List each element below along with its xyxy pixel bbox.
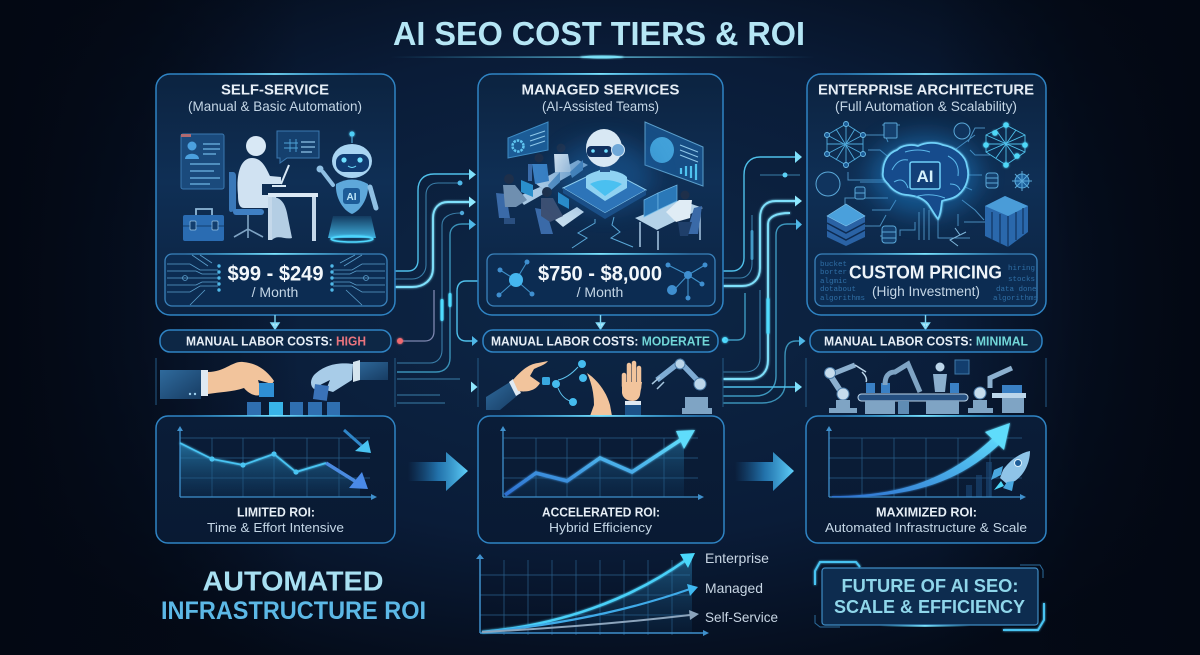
person in grey shirt: [496, 174, 527, 224]
panel: accelerated roi: [478, 415, 724, 543]
per month label: / Month: [252, 284, 298, 300]
chart: tier roi comparison: [476, 550, 778, 636]
connectors: self-service to managed: [395, 169, 478, 403]
decorative algorithm text left: algorithms: [820, 295, 865, 303]
text: limited roi: LIMITED ROI:: [237, 504, 315, 520]
icon: right neural network: [983, 122, 1028, 168]
icon: server racks right: [985, 196, 1028, 247]
pill: manual labor minimal: [810, 330, 1042, 352]
price box: enterprise: [815, 253, 1038, 306]
laptop back: [570, 160, 583, 178]
icon: document db: [884, 123, 897, 138]
panel: limited roi: [156, 415, 395, 543]
icon: puzzle network: [950, 228, 966, 246]
illustration: human and robot hand blocks: [160, 360, 388, 416]
pill: manual labor moderate: MANUAL LABOR COSTS: MODERATE: [491, 334, 710, 348]
icon: profile card: [181, 134, 224, 189]
icon: briefcase: [183, 209, 224, 241]
left desk: [517, 187, 547, 205]
heading: automated infrastructure roi: AUTOMATED: [202, 566, 384, 596]
icon: ai robot: [316, 131, 376, 242]
high investment: (High Investment): [872, 284, 980, 299]
pill: manual labor high: MANUAL LABOR COSTS: HIGH: [186, 334, 366, 348]
text: maximized roi: MAXIMIZED ROI:: [876, 504, 977, 520]
pill: manual labor moderate: [483, 330, 718, 352]
callout: future of ai seo: SCALE & EFFICIENCY: [834, 597, 1025, 617]
illustration: right workstation: [635, 185, 703, 250]
heading: automated infrastructure roi: INFRASTRUCTURE ROI: [161, 597, 426, 625]
decorative algorithm text left: dotabout: [820, 286, 856, 294]
price box: managed: [487, 253, 715, 306]
text: accelerated roi: ACCELERATED ROI:: [542, 504, 660, 520]
price: self-service: $99 - $249: [228, 262, 324, 286]
icon: database right: [986, 173, 998, 188]
icon: ai brain: AI: [916, 167, 934, 186]
illustration: hands and robot arm: [486, 359, 712, 416]
subheading: ai-assisted teams: (AI-Assisted Teams): [542, 98, 659, 114]
panel: maximized roi: [806, 415, 1046, 543]
illustration: right monitor: [645, 122, 703, 186]
node graph decoration: [499, 262, 705, 298]
arrow: self-service price to labor: [271, 315, 279, 329]
price: managed: $750 - $8,000: [538, 262, 662, 286]
front screen: [558, 192, 569, 209]
hand row bracket lines: [156, 358, 1046, 407]
connector: roi to future callout: [925, 543, 927, 568]
icon: ai robot: AI: [346, 192, 357, 203]
illustration: left monitor: [508, 122, 548, 158]
left monitor screen: [521, 180, 533, 197]
decorative algorithm text right: data done: [996, 286, 1037, 294]
arrow: roi tier two to three: [735, 452, 794, 491]
icon: small database: [855, 187, 865, 199]
person in white shirt: [554, 144, 571, 172]
icon: stacked server left: [827, 204, 865, 246]
callout: future of ai seo: FUTURE OF AI SEO:: [842, 576, 1018, 596]
illustration: robotic factory: [824, 360, 1026, 414]
icon: left neural network: [824, 122, 866, 168]
decorative algorithm text right: [993, 265, 1038, 303]
price box: self-service: [165, 253, 387, 306]
illustration: ai robot on pedestal: [557, 129, 653, 248]
chart: rising roi: [500, 426, 704, 500]
heading: enterprise architecture: ENTERPRISE ARCHITECTURE: [818, 82, 1034, 98]
icon: network node: [1012, 171, 1032, 191]
subheading: manual and basic automation: (Manual & Basic Automation): [188, 98, 362, 114]
illustration: circuit links: [845, 125, 990, 238]
heading: self-service: SELF-SERVICE: [221, 82, 329, 98]
circuit decoration: [167, 255, 385, 305]
text: automated infrastructure: Automated Infrastructure & Scale: [825, 520, 1027, 535]
pill: manual labor minimal: MANUAL LABOR COSTS: MINIMAL: [824, 334, 1028, 348]
icon: rocket: [991, 451, 1030, 491]
heading: automated infrastructure roi: [161, 566, 426, 625]
person with dark hair: [535, 187, 563, 234]
person in blue shirt: [528, 154, 549, 184]
legend: enterprise: Enterprise: [705, 550, 769, 566]
decorative algorithm text right: algorithms: [993, 295, 1038, 303]
icon: chat window: [277, 131, 319, 163]
title: AI SEO COST TIERS & ROI: [393, 15, 805, 52]
panel: enterprise architecture: [807, 73, 1046, 315]
icon: database middle: [882, 226, 896, 243]
pill: manual labor high: [160, 330, 391, 352]
legend: self-service: Self-Service: [705, 609, 778, 625]
icon: person at desk: [229, 136, 318, 241]
subheading: full automation: (Full Automation & Scalability): [835, 98, 1017, 114]
custom pricing: CUSTOM PRICING: [849, 262, 1002, 282]
front desk: [555, 207, 584, 227]
callout: future of ai seo: [815, 562, 1044, 630]
connectors: managed to enterprise: [722, 151, 806, 403]
chart: declining roi: [177, 426, 377, 500]
back desk: [535, 160, 588, 190]
arrow: enterprise price to labor: [922, 315, 930, 329]
panel: managed services: [478, 73, 723, 315]
decorative algorithm text left: bucket: [820, 261, 847, 269]
decorative algorithm text right: hiring: [1008, 265, 1035, 273]
chart: maximized growth: [826, 423, 1026, 500]
icon: small brain: [816, 172, 840, 196]
decorative algorithm text left: algmic: [820, 278, 847, 286]
decorative algorithm text left: [820, 261, 865, 303]
legend: managed: Managed: [705, 580, 763, 596]
icon: small brain right: [954, 123, 970, 139]
arrow: managed price to labor: [596, 315, 604, 329]
decorative algorithm text right: stocks: [1008, 276, 1035, 284]
decorative algorithm text left: borter: [820, 269, 847, 277]
heading: managed services: MANAGED SERVICES: [522, 82, 680, 98]
per month label: / Month: [577, 284, 623, 300]
text: time and effort intensive: Time & Effort Intensive: [207, 520, 344, 535]
illustration: left team: [496, 144, 588, 234]
text: hybrid efficiency: Hybrid Efficiency: [549, 520, 653, 535]
arrow: roi tier one to two: [408, 452, 468, 491]
panel: self-service: [156, 73, 395, 315]
laptop middle: [548, 172, 560, 191]
icon: ai brain: [870, 135, 980, 240]
